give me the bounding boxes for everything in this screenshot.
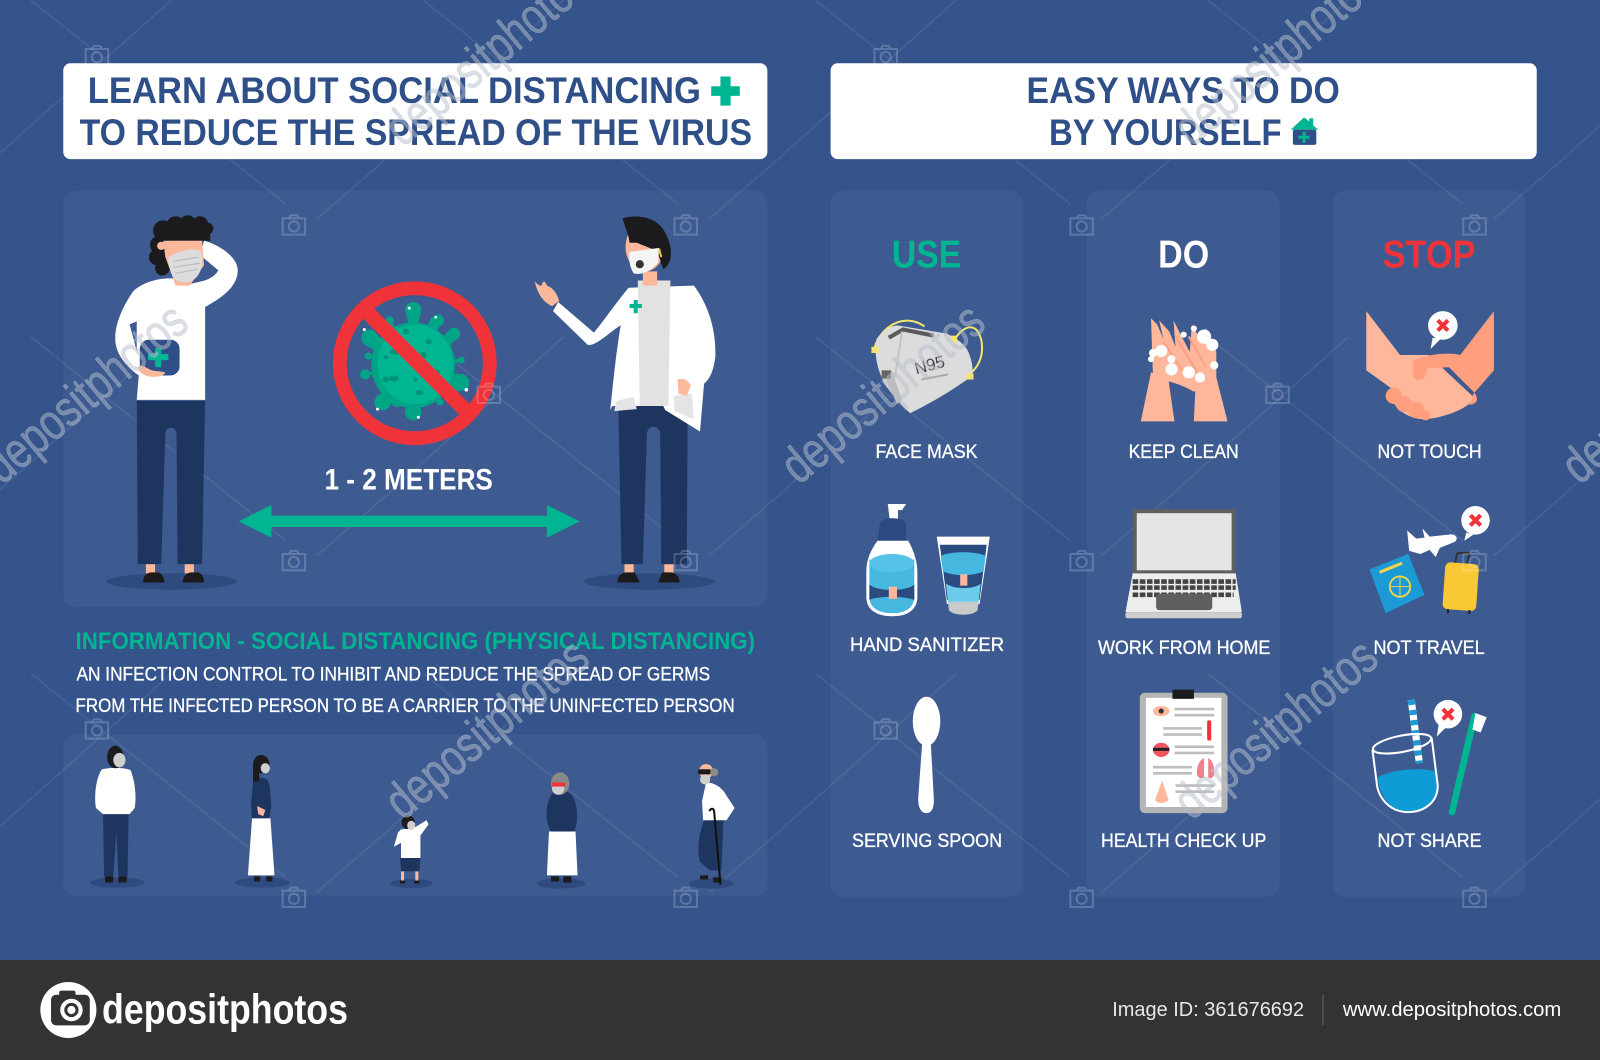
information text block: AN INFECTION CONTROL TO INHIBIT AND REDUCE THE SPREAD OF GERMS [77, 663, 710, 685]
label: not share: NOT SHARE [1378, 830, 1482, 852]
icon: laptop [1126, 509, 1242, 618]
watermark: camera icons [86, 46, 1486, 907]
label: keep clean: KEEP CLEAN [1129, 441, 1239, 463]
right title card: BY YOURSELF [1049, 111, 1282, 153]
icon: glass, straw and toothbrush [1371, 700, 1487, 812]
column heading: stop: STOP [1383, 233, 1476, 276]
label: face mask: FACE MASK [876, 441, 978, 463]
left title card: TO REDUCE THE SPREAD OF THE VIRUS [80, 111, 752, 153]
panel: main distancing illustration [63, 191, 767, 607]
figure: woman in long skirt [235, 755, 290, 888]
information text block: INFORMATION - SOCIAL DISTANCING (PHYSICAL DISTANCING) [76, 628, 755, 655]
watermark: diagonal text: depositphotos [769, 292, 995, 494]
column heading: use: USE [892, 233, 961, 276]
distance label: 1 - 2 METERS [324, 464, 493, 497]
footer website: www.depositphotos.com [1342, 999, 1561, 1021]
icon: N95 face mask [871, 321, 982, 413]
figure: elderly woman [537, 772, 586, 889]
icon: washing hands [1141, 318, 1228, 421]
column heading: do: DO [1158, 233, 1209, 276]
watermark: diagonal text: depositphotos [1162, 627, 1388, 830]
information text block: FROM THE INFECTED PERSON TO BE A CARRIER TO THE UNINFECTED PERSON [76, 695, 735, 717]
footer logo [40, 982, 348, 1038]
label: hand sanitizer: HAND SANITIZER [850, 634, 1004, 656]
panel: people row [63, 735, 767, 896]
figure: elderly man with cane [689, 764, 735, 889]
panel: use column [831, 191, 1022, 897]
left title card [63, 63, 767, 159]
person: doctor [535, 216, 715, 590]
icon: N95 face mask: N95 [912, 352, 947, 378]
watermark: diagonal text [0, 0, 1600, 830]
label: health check up: HEALTH CHECK UP [1101, 830, 1266, 852]
person: man with mask holding bag [106, 215, 238, 590]
right title card: EASY WAYS TO DO [1027, 69, 1340, 111]
label: serving spoon: SERVING SPOON [852, 830, 1002, 852]
arrow: double-headed distance arrow [239, 505, 580, 538]
footer logo: depositphotos [102, 985, 348, 1032]
figure: man [90, 746, 145, 888]
icon: hand sanitizer bottle and tube [866, 504, 990, 616]
icon: handshake not touch [1366, 311, 1494, 420]
label: not touch: NOT TOUCH [1378, 441, 1482, 463]
panel: stop column [1333, 191, 1526, 897]
information text block [76, 628, 755, 717]
left title card: LEARN ABOUT SOCIAL DISTANCING [88, 69, 701, 111]
people row figures [90, 746, 735, 889]
label: not travel: NOT TRAVEL [1373, 637, 1485, 659]
figure: child [390, 816, 433, 888]
right title card [831, 63, 1537, 159]
watermark: diagonal text: depositphotos [373, 627, 599, 830]
footer bar [0, 960, 1600, 1060]
icon: health check clipboard [1140, 690, 1228, 813]
icon: virus with prohibition sign [340, 288, 490, 438]
panel: do column [1087, 191, 1280, 897]
icon: serving spoon [913, 697, 940, 813]
label: work from home: WORK FROM HOME [1098, 637, 1270, 659]
icon: passport, plane and suitcase [1369, 506, 1490, 614]
footer image id: Image ID: 361676692 [1112, 999, 1304, 1021]
